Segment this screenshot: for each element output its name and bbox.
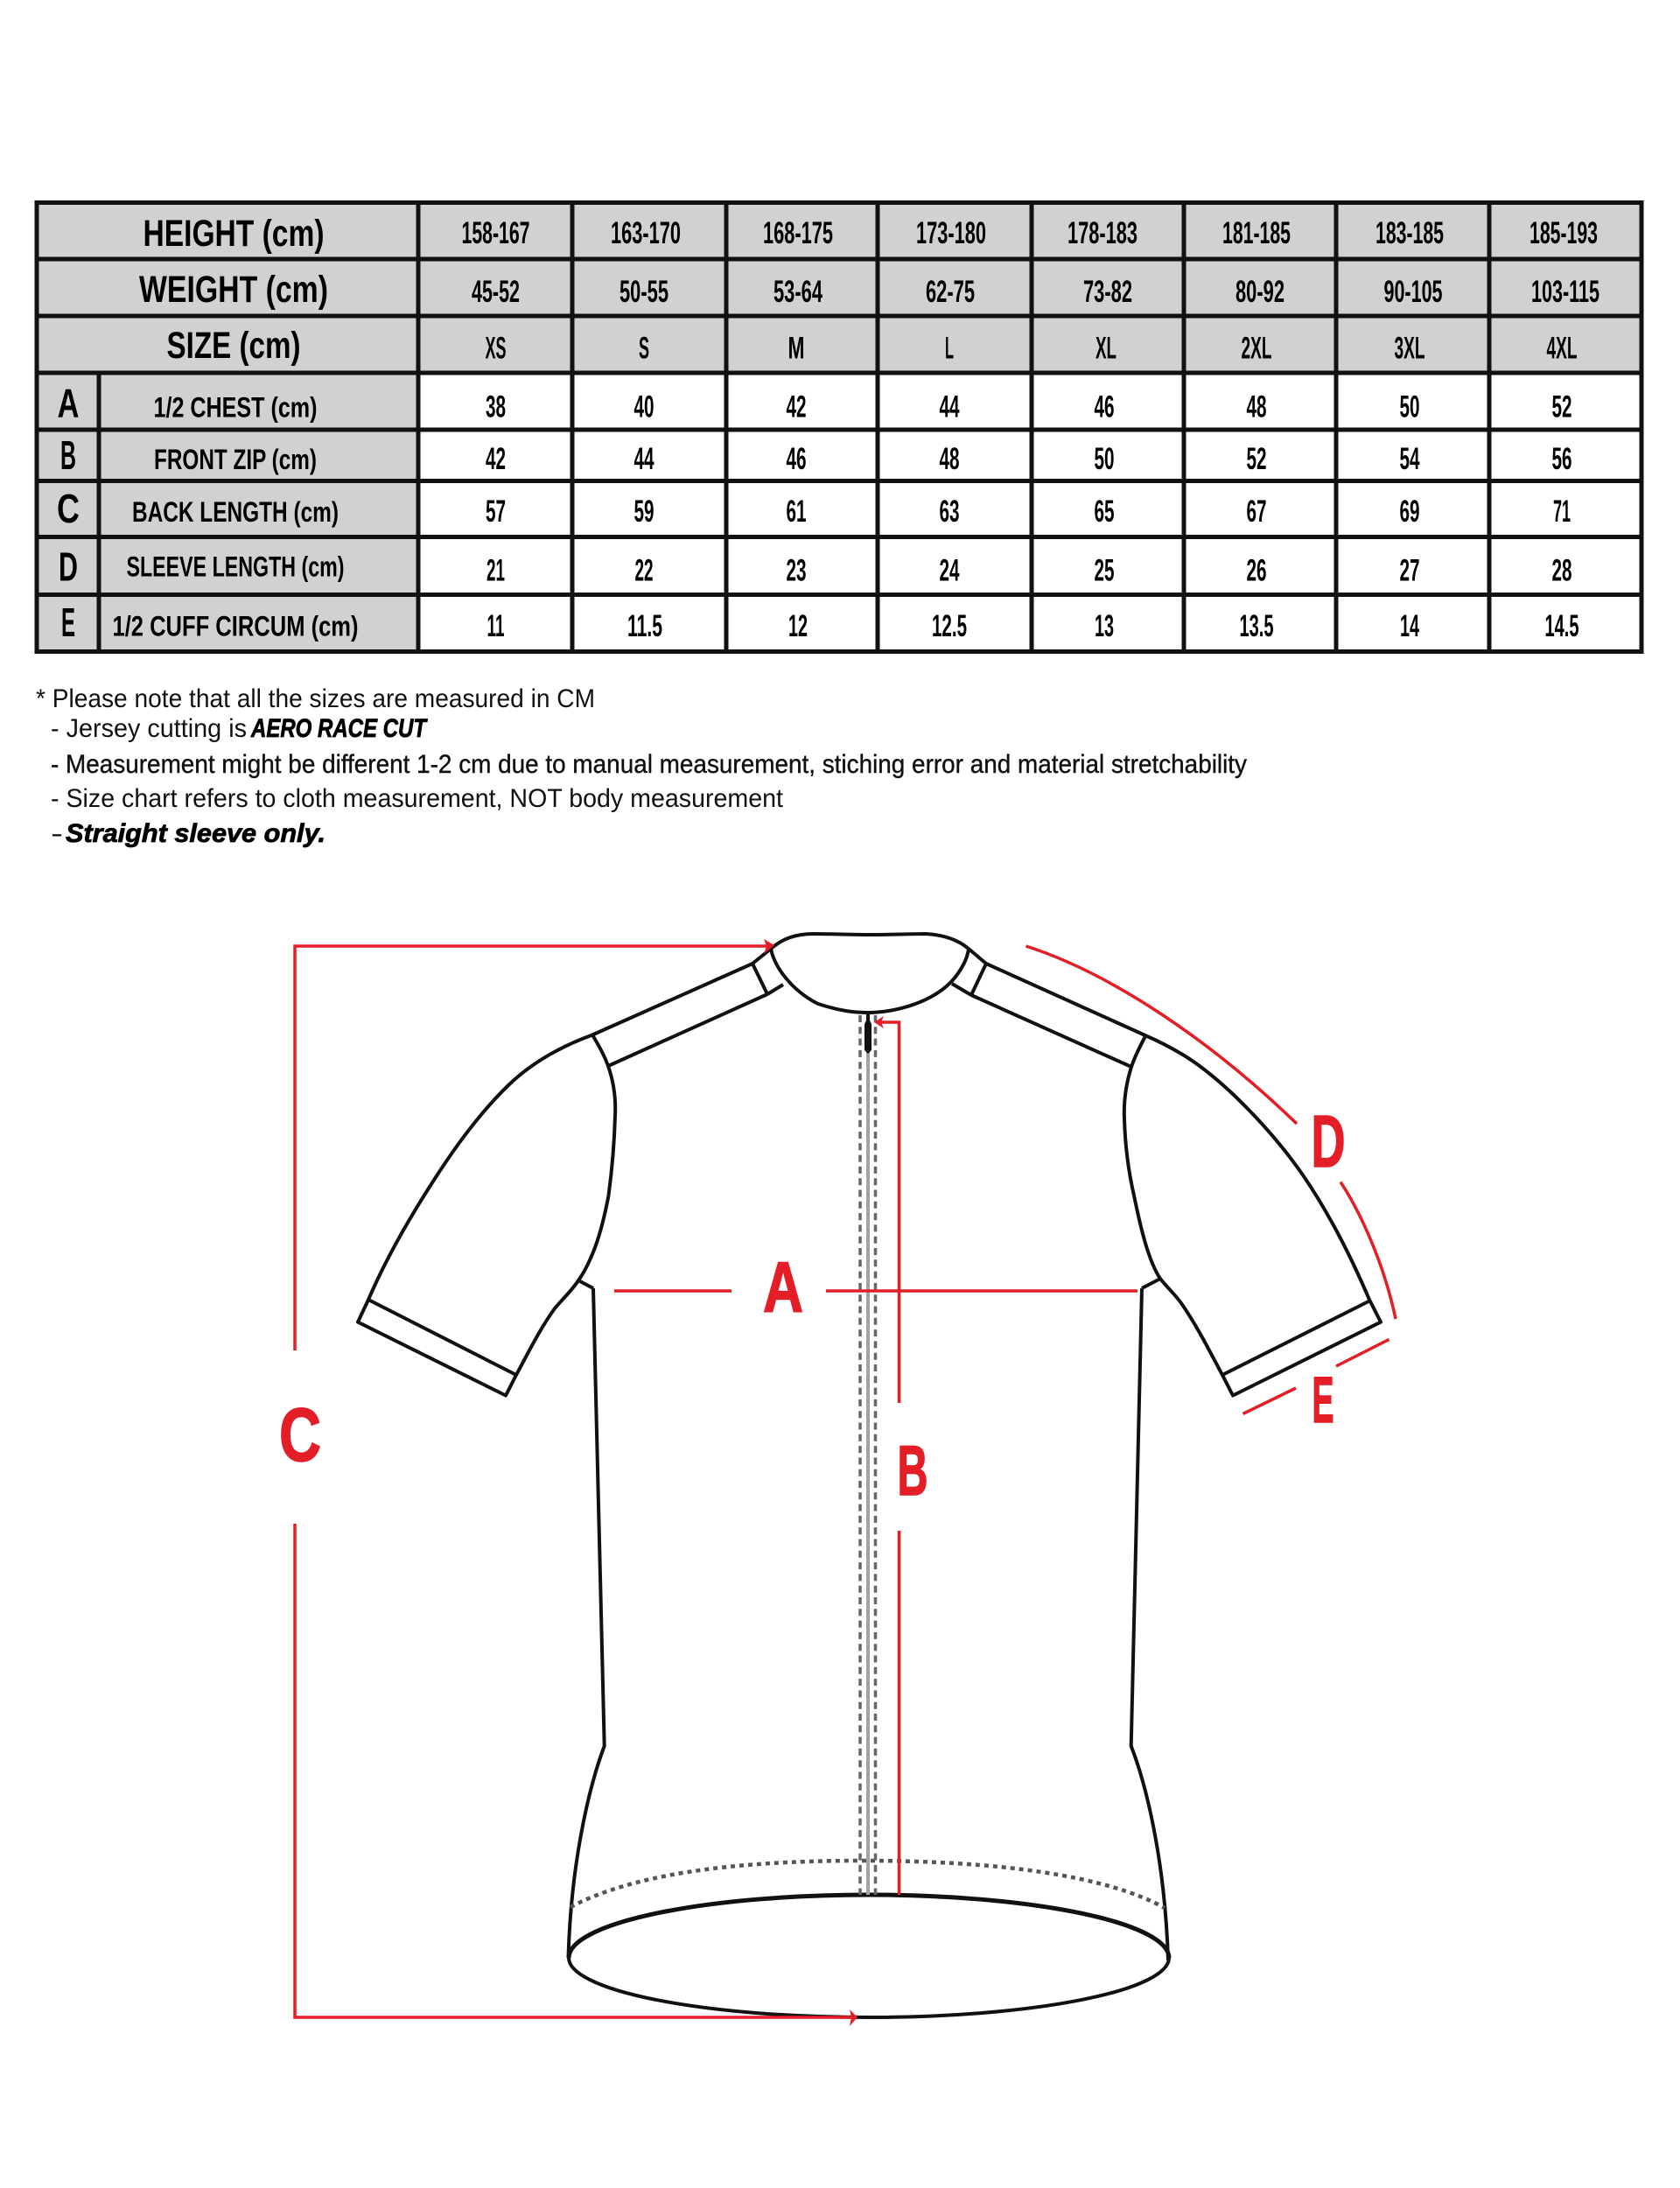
row B: front zip: FRONT ZIP (cm) <box>154 444 317 475</box>
row: height: 183-185 <box>1376 216 1444 250</box>
row A: half chest: 50 <box>1400 390 1419 424</box>
row: weight: 50-55 <box>620 275 668 309</box>
row A: half chest: 52 <box>1552 390 1572 424</box>
row: size: 3XL <box>1395 331 1424 366</box>
row: weight: 53-64 <box>774 275 822 309</box>
row A: half chest: 1/2 CHEST (cm) <box>154 392 317 424</box>
row C: back length: 69 <box>1400 494 1419 529</box>
row D: sleeve length: D <box>59 544 78 590</box>
measurement notes: * Please note that all the sizes are measured in CM <box>36 684 595 713</box>
row: weight <box>139 269 1600 311</box>
jersey right shoulder and sleeve <box>971 964 1381 1395</box>
measure E: half cuff: E <box>1312 1364 1334 1436</box>
row D: sleeve length: SLEEVE LENGTH (cm) <box>126 551 345 583</box>
jersey hem stitching <box>570 1861 1165 1908</box>
row E: half cuff circumference: 1/2 CUFF CIRCUM (cm) <box>112 611 359 642</box>
row E: half cuff circumference: 11 <box>486 609 504 643</box>
row C: back length: 59 <box>634 494 654 529</box>
jersey collar <box>752 934 986 1013</box>
measurement notes: - Size chart refers to cloth measurement, NOT body measurement <box>51 784 784 813</box>
row C: back length: C <box>57 486 80 531</box>
measure D: sleeve length <box>1026 946 1396 1319</box>
row E: half cuff circumference: E <box>61 600 75 645</box>
row: height: HEIGHT (cm) <box>144 213 324 255</box>
measure B: front zip <box>874 1016 928 1895</box>
jersey diagram <box>279 934 1396 2026</box>
row B: front zip: 48 <box>940 442 959 476</box>
measurement notes: AERO RACE CUT <box>250 714 428 743</box>
row: size: S <box>639 331 649 366</box>
row: height: 158-167 <box>462 216 530 250</box>
row B: front zip: 52 <box>1246 442 1267 476</box>
row: height: 163-170 <box>611 216 681 250</box>
row C: back length: 71 <box>1553 494 1571 529</box>
row: height <box>144 213 1598 255</box>
row D: sleeve length: 26 <box>1246 553 1267 588</box>
row: weight: 103-115 <box>1531 275 1600 309</box>
row E: half cuff circumference <box>61 600 1578 645</box>
row D: sleeve length: 27 <box>1400 553 1419 588</box>
row C: back length: 67 <box>1246 494 1267 529</box>
measure E: half cuff <box>1242 1339 1390 1436</box>
row D: sleeve length: 23 <box>786 553 807 588</box>
row A: half chest: 48 <box>1246 390 1267 424</box>
size table <box>35 200 1643 654</box>
zipper pull <box>864 1013 872 1054</box>
row: size: SIZE (cm) <box>166 325 301 367</box>
row: size: 2XL <box>1241 331 1272 366</box>
row D: sleeve length: 24 <box>940 553 960 588</box>
row B: front zip: 44 <box>634 442 654 476</box>
row: size: 4XL <box>1547 331 1577 366</box>
row B: front zip: B <box>60 432 76 478</box>
row A: half chest: 38 <box>486 390 506 424</box>
measure C: back length <box>279 939 858 2026</box>
row E: half cuff circumference: 14.5 <box>1545 609 1578 643</box>
row D: sleeve length: 22 <box>635 553 653 588</box>
row C: back length: BACK LENGTH (cm) <box>132 496 339 528</box>
row C: back length <box>57 486 1571 531</box>
row A: half chest: 46 <box>1094 390 1115 424</box>
row: size: XS <box>485 331 506 366</box>
row: weight: 80-92 <box>1236 275 1284 309</box>
row: size: M <box>788 331 805 366</box>
row C: back length: 63 <box>940 494 959 529</box>
row E: half cuff circumference: 12 <box>788 609 808 643</box>
measurement notes: Straight sleeve only. <box>66 819 326 848</box>
row B: front zip <box>60 432 1572 478</box>
row D: sleeve length: 21 <box>486 553 505 588</box>
row E: half cuff circumference: 13 <box>1095 609 1114 643</box>
row B: front zip: 50 <box>1094 442 1115 476</box>
row A: half chest: 44 <box>940 390 960 424</box>
measurement notes: - <box>51 819 63 848</box>
row: size: L <box>945 331 954 366</box>
measure C: back length: C <box>279 1393 321 1477</box>
row E: half cuff circumference: 13.5 <box>1239 609 1274 643</box>
row A: half chest: 40 <box>634 390 654 424</box>
row: size <box>166 325 1577 367</box>
row B: front zip: 54 <box>1400 442 1420 476</box>
row: size: XL <box>1096 331 1116 366</box>
measure D: sleeve length: D <box>1311 1100 1346 1182</box>
measurement notes: - Jersey cutting is <box>51 714 247 743</box>
row E: half cuff circumference: 14 <box>1400 609 1419 643</box>
row: weight: 90-105 <box>1384 275 1442 309</box>
row A: half chest: 42 <box>786 390 807 424</box>
front zipper <box>860 1013 875 1895</box>
jersey hem opening <box>569 1895 1169 2017</box>
jersey body sides <box>569 1288 1168 1960</box>
measure B: front zip: B <box>898 1432 928 1511</box>
row D: sleeve length: 25 <box>1094 553 1115 588</box>
measure A: half chest: A <box>763 1248 803 1328</box>
row B: front zip: 56 <box>1552 442 1572 476</box>
row: weight: 45-52 <box>472 275 520 309</box>
row B: front zip: 46 <box>786 442 807 476</box>
row B: front zip: 42 <box>486 442 506 476</box>
row: weight: 62-75 <box>926 275 975 309</box>
row: height: 173-180 <box>916 216 986 250</box>
row: height: 178-183 <box>1068 216 1138 250</box>
row C: back length: 57 <box>486 494 506 529</box>
row: height: 168-175 <box>763 216 833 250</box>
row A: half chest: A <box>58 380 79 425</box>
row D: sleeve length: 28 <box>1552 553 1572 588</box>
measurement notes: - Measurement might be different 1-2 cm due to manual measurement, stiching error and material stretchability <box>51 750 1247 779</box>
row C: back length: 65 <box>1094 494 1115 529</box>
row E: half cuff circumference: 12.5 <box>932 609 967 643</box>
row D: sleeve length <box>59 544 1572 590</box>
row: height: 181-185 <box>1222 216 1291 250</box>
measurement notes <box>36 684 1247 848</box>
jersey left shoulder and sleeve <box>358 964 767 1395</box>
row: weight: WEIGHT (cm) <box>139 269 328 311</box>
row C: back length: 61 <box>786 494 807 529</box>
row A: half chest <box>58 380 1572 425</box>
row: height: 185-193 <box>1530 216 1598 250</box>
row E: half cuff circumference: 11.5 <box>627 609 662 643</box>
row: weight: 73-82 <box>1083 275 1132 309</box>
